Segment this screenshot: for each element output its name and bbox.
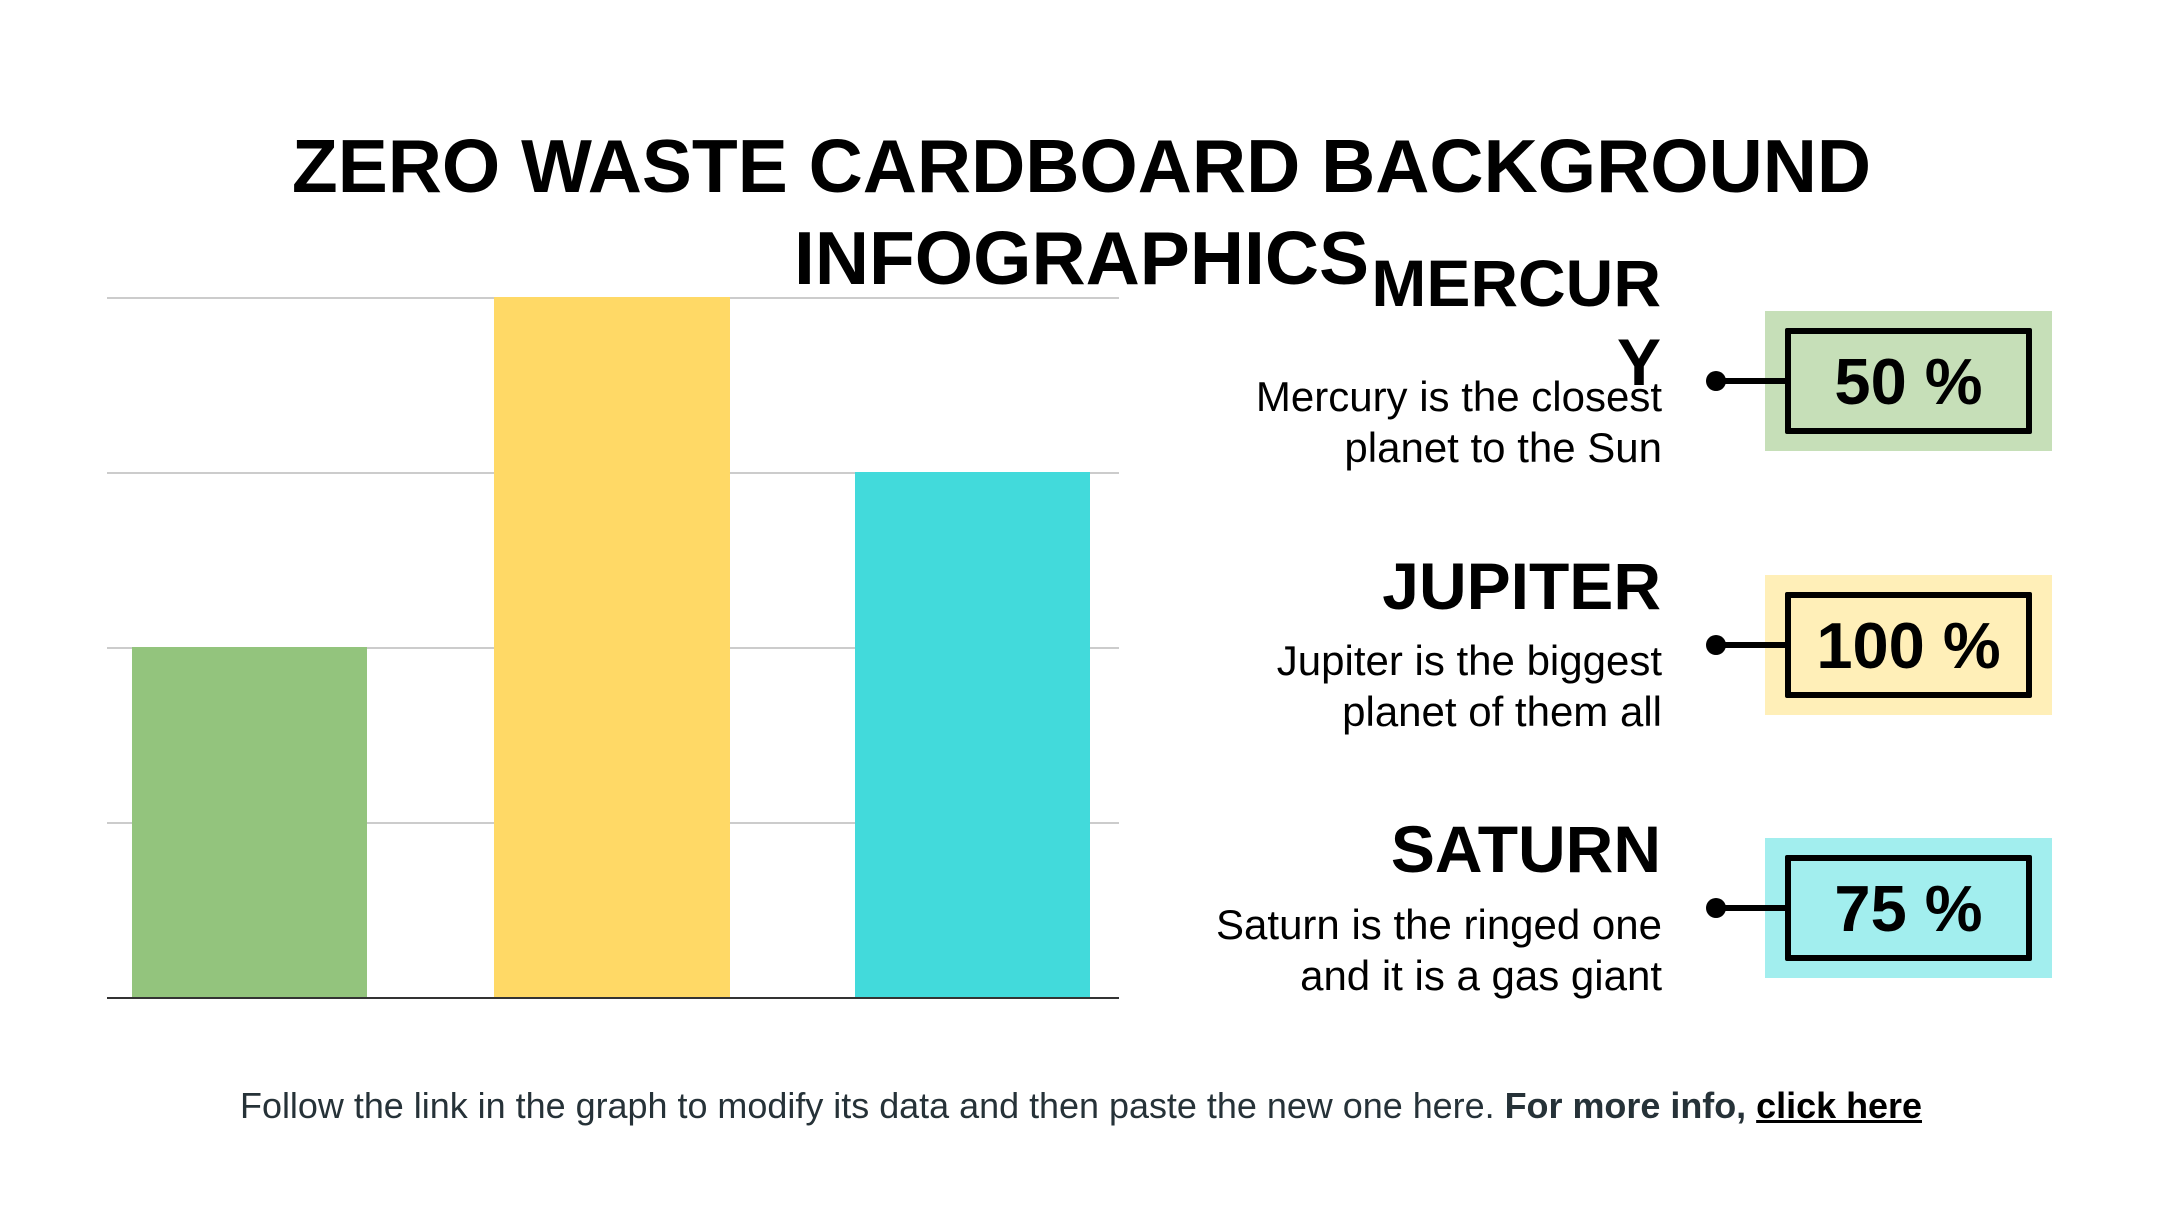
bar: Jupiter (494, 297, 730, 997)
title: ZERO WASTE CARDBOARD BACKGROUND (292, 124, 1871, 208)
heading: Saturn: SATURN (1391, 812, 1661, 886)
value box: Jupiter (1765, 574, 2052, 714)
bar chart (107, 297, 1119, 999)
value box: Jupiter: 100 % (1816, 608, 2001, 682)
value box: Mercury: 50 % (1834, 345, 1983, 418)
value box: Mercury (1765, 311, 2052, 451)
text: Saturn description: Saturn is the ringed one (1216, 900, 1662, 948)
text: Mercury description (1256, 373, 1662, 471)
text: Mercury description: Mercury is the closest (1256, 373, 1662, 420)
footer note: Follow the link in the graph to modify its data and then paste the new one here. For more info, click here (240, 1084, 1922, 1126)
bar: Mercury (132, 647, 367, 997)
value box: Saturn: 75 % (1834, 872, 1983, 945)
connector: Jupiter (1706, 635, 1785, 655)
heading: Mercury: MERCURY (1371, 246, 1661, 399)
connector: Saturn (1706, 898, 1785, 918)
text: Jupiter description: planet of them all (1342, 688, 1662, 735)
bar: Saturn (855, 472, 1090, 997)
text: Saturn description: and it is a gas giant (1300, 952, 1662, 998)
heading: Jupiter: JUPITER (1382, 549, 1661, 623)
text: Mercury description: planet to the Sun (1344, 424, 1662, 471)
text: Saturn description (1216, 900, 1662, 998)
title (292, 124, 1871, 300)
title: INFOGRAPHICS (794, 216, 1369, 300)
connector: Mercury (1706, 371, 1785, 391)
text: Jupiter description (1277, 637, 1662, 735)
value box: Saturn (1765, 838, 2052, 978)
text: Jupiter description: Jupiter is the biggest (1277, 637, 1662, 684)
